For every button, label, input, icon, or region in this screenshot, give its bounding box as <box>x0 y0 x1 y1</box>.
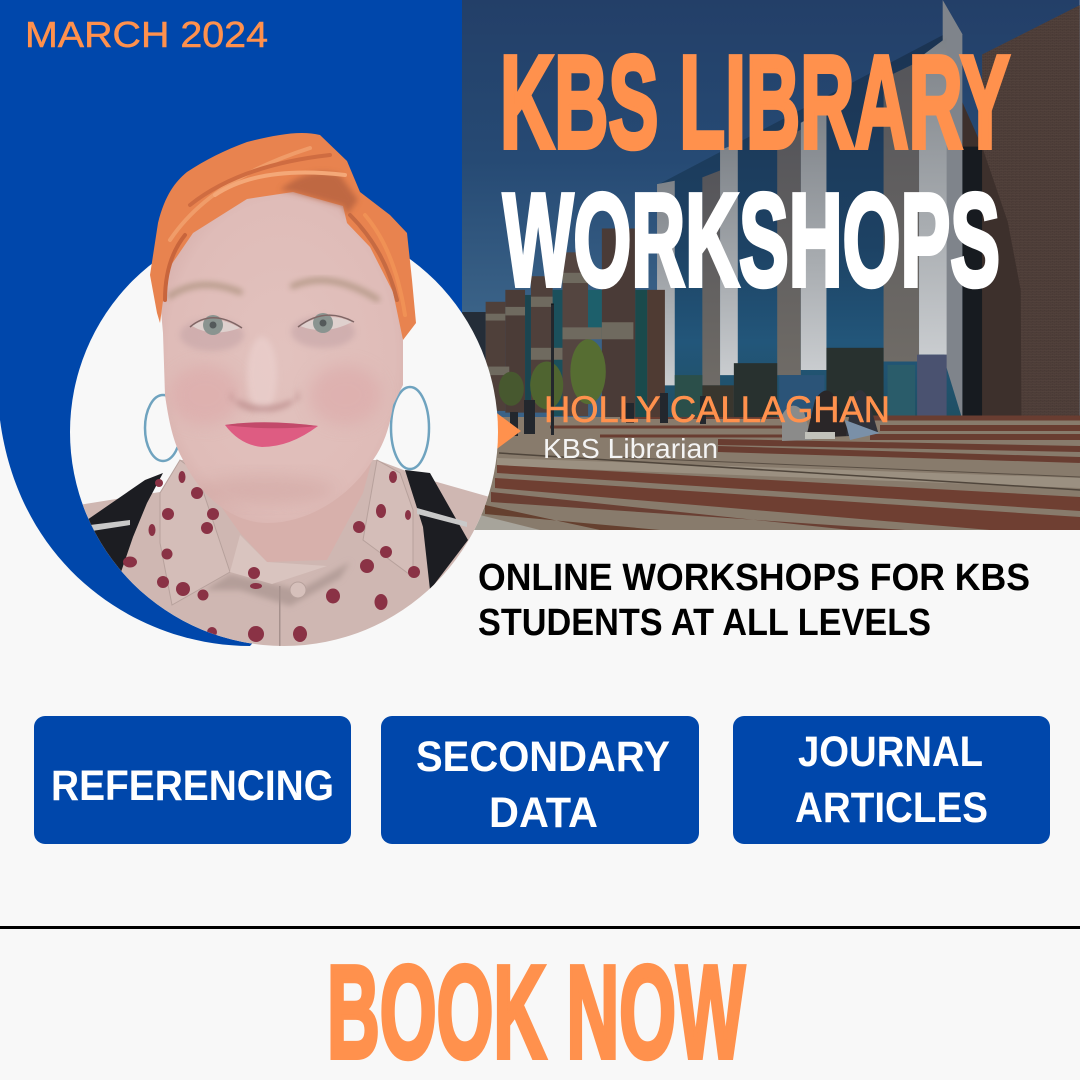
people <box>510 305 880 441</box>
button: secondary data: SECONDARY <box>416 733 670 781</box>
lips <box>225 423 318 447</box>
button: secondary data: DATA <box>489 789 598 837</box>
date: MARCH 2024 <box>25 14 268 55</box>
subtitle: ONLINE WORKSHOPS FOR KBS <box>478 557 1030 599</box>
button: journal articles: ARTICLES <box>795 784 988 832</box>
subtitle <box>478 557 1030 644</box>
presenter name: HOLLY CALLAGHAN <box>544 389 890 430</box>
blue shape <box>0 0 462 646</box>
shirt and straps <box>82 459 488 646</box>
button: journal articles <box>733 716 1050 844</box>
arrow marker <box>490 408 521 454</box>
face <box>160 190 403 523</box>
steps <box>462 417 1080 530</box>
button: secondary data <box>381 716 699 844</box>
eyebrows <box>170 280 377 299</box>
eyes <box>190 313 354 335</box>
button: referencing: REFERENCING <box>51 762 334 810</box>
button: referencing <box>34 716 351 844</box>
hair <box>150 133 416 340</box>
white circle <box>70 218 498 646</box>
subtitle: STUDENTS AT ALL LEVELS <box>478 602 931 644</box>
portrait <box>82 133 488 646</box>
button: journal articles: JOURNAL <box>798 728 983 776</box>
presenter role: KBS Librarian <box>543 433 718 464</box>
building photo <box>462 0 1080 535</box>
earrings <box>145 387 429 469</box>
